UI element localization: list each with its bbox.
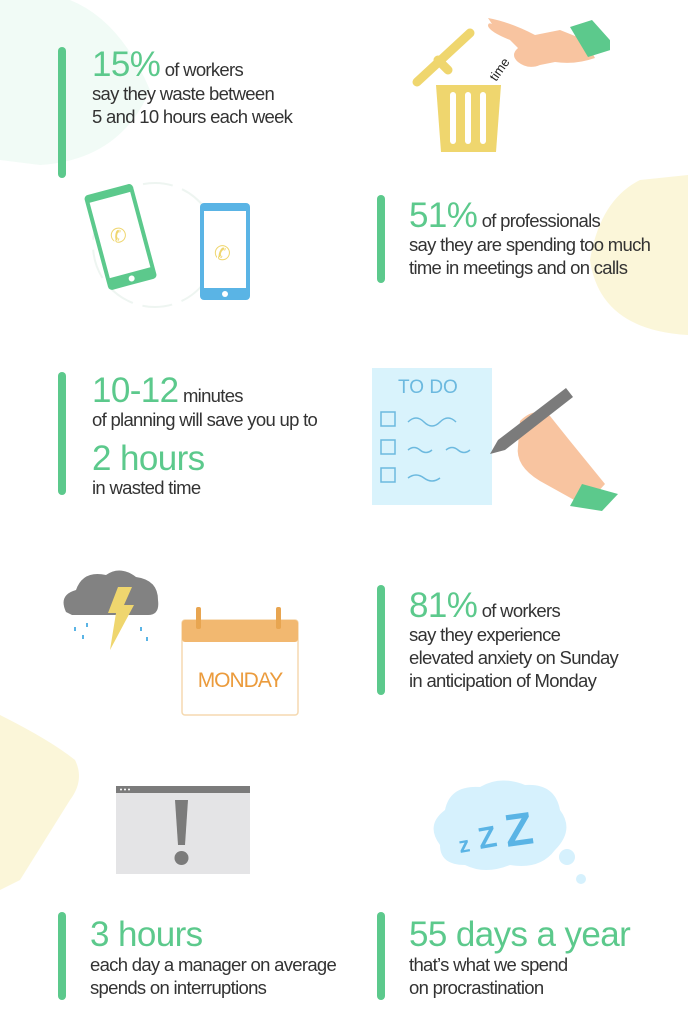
stat: 15% <box>58 45 293 178</box>
stat: 3 hours: each day a manager on average <box>90 954 336 975</box>
stat: 51%: time in meetings and on calls <box>409 257 627 278</box>
stat: 55 days a year: 55 days a year <box>409 915 630 954</box>
icon: sleep cloud zzz: Z <box>501 801 536 857</box>
stat: 55 days a year <box>377 912 630 1000</box>
icon: sleep cloud zzz: Z <box>475 820 499 856</box>
stat: 10-12 minutes: 10-12 minutes <box>92 371 243 410</box>
stat: 81% <box>377 585 619 695</box>
icon: todo list with hand: TO DO <box>398 377 458 398</box>
icon: phones <box>84 184 250 300</box>
icon: calendar monday: MONDAY <box>198 669 283 692</box>
stat: 10-12 minutes: in wasted time <box>92 477 200 498</box>
stat: 3 hours <box>58 912 336 1000</box>
stat: 3 hours: spends on interruptions <box>90 977 266 998</box>
icon: phones: ✆ <box>214 243 231 265</box>
stat: 81%: in anticipation of Monday <box>409 670 596 691</box>
stat: 51% <box>377 195 650 283</box>
stat: 3 hours: 3 hours <box>90 915 203 954</box>
icon: storm cloud <box>64 570 158 650</box>
icon: sleep cloud zzz: z <box>457 831 472 858</box>
stat: 81%: 81% of workers <box>409 586 560 625</box>
icon: calendar monday <box>181 607 299 716</box>
stat: 15%: 5 and 10 hours each week <box>92 106 292 127</box>
stat: 81%: elevated anxiety on Sunday <box>409 647 618 668</box>
icon: todo list with hand <box>372 368 618 511</box>
stat: 15%: 15% of workers <box>92 45 243 84</box>
stat: 10-12 minutes <box>58 371 317 498</box>
icon: sleep cloud zzz <box>434 780 586 884</box>
stat: 10-12 minutes: of planning will save you up to <box>92 409 317 430</box>
stat: 51%: say they are spending too much <box>409 234 650 255</box>
stat: 51%: 51% of professionals <box>409 196 600 235</box>
icon: phones: ✆ <box>108 224 130 249</box>
stat: 55 days a year: that’s what we spend <box>409 954 567 975</box>
stat: 81%: say they experience <box>409 624 560 645</box>
icon: trash can with time: time <box>486 55 513 84</box>
stat: 55 days a year: on procrastination <box>409 977 543 998</box>
icon: alert window <box>116 786 250 874</box>
stat: 10-12 minutes: 2 hours <box>92 439 205 478</box>
stat: 15%: say they waste between <box>92 83 274 104</box>
icon: trash can with time <box>412 18 610 152</box>
